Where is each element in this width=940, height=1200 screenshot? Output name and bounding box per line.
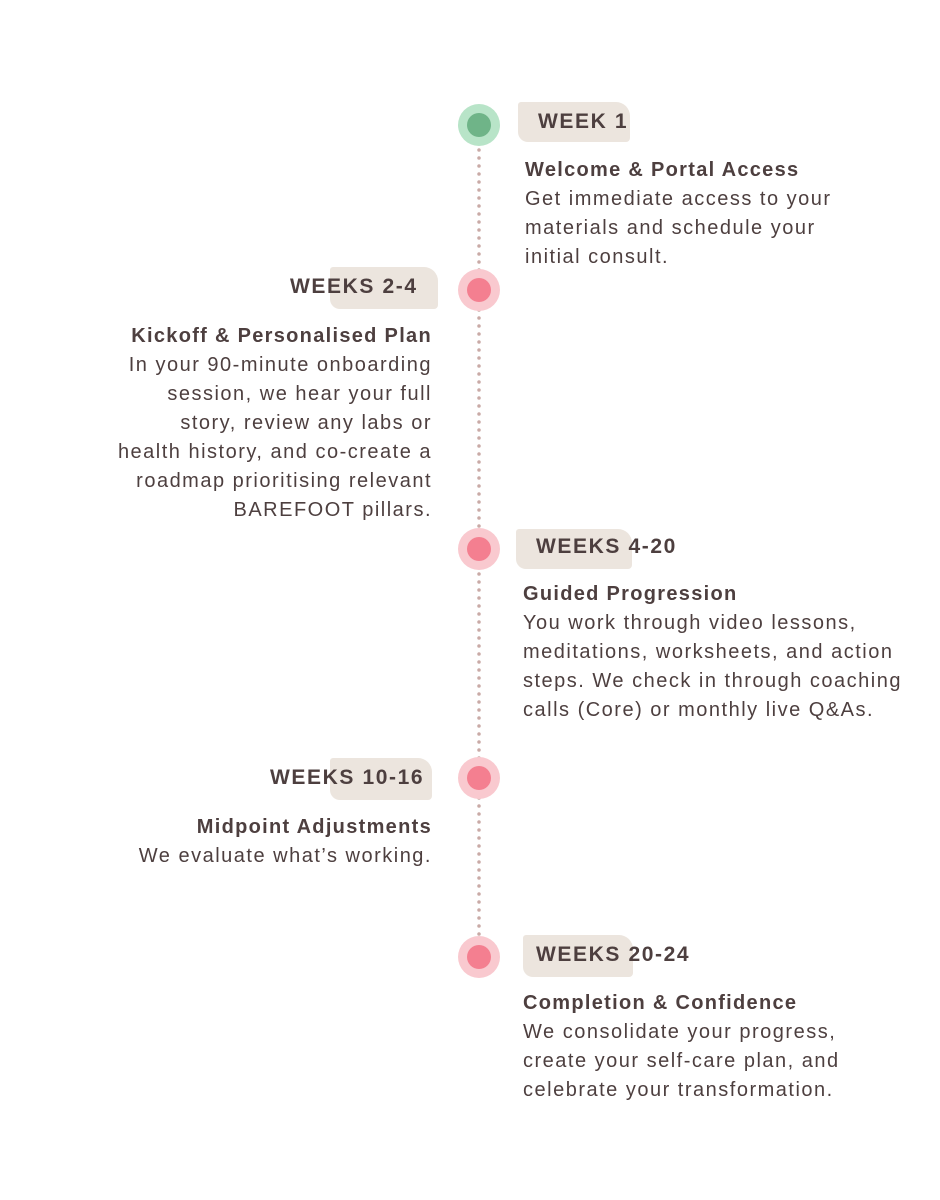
node: weeks 10-16 [458,757,500,799]
text: week 1: initial consult. [525,246,669,268]
text: weeks 10-16: Midpoint Adjustments [197,816,432,838]
brush: weeks 10-16 [330,758,432,800]
text: weeks 2-4: story, review any labs or [180,412,432,434]
text: weeks 2-4: In your 90-minute onboarding [129,354,432,376]
text: weeks 20-24: celebrate your transformation. [523,1079,834,1101]
text: week 1 [525,159,832,268]
text: weeks 10-16 [138,816,432,867]
brush: week 1 [518,102,630,142]
node: weeks 20-24 [458,936,500,978]
text: weeks 20-24: create your self-care plan, and [523,1050,840,1072]
node: weeks 4-20 [458,528,500,570]
text: weeks 20-24: We consolidate your progress, [523,1021,836,1043]
text: weeks 20-24: Completion & Confidence [523,992,797,1014]
text: weeks 4-20: calls (Core) or monthly live Q&As. [523,699,874,721]
text: week 1: Welcome & Portal Access [525,159,799,181]
text: weeks 4-20: You work through video lessons, [523,612,857,634]
node: week 1 [458,104,500,146]
text: weeks 2-4 [118,325,432,521]
heading: weeks 2-4: WEEKS 2-4 [290,275,418,298]
brush: weeks 4-20 [516,529,632,569]
text: weeks 2-4: BAREFOOT pillars. [234,499,432,521]
text: weeks 20-24 [523,992,840,1101]
brush: weeks 20-24 [523,935,633,977]
text: weeks 2-4: session, we hear your full [167,383,432,405]
heading: weeks 4-20: WEEKS 4-20 [536,535,677,558]
text: weeks 4-20: meditations, worksheets, and action [523,641,893,663]
text: week 1: materials and schedule your [525,217,816,239]
heading: weeks 10-16: WEEKS 10-16 [270,766,424,789]
text: weeks 4-20 [523,583,902,721]
text: weeks 10-16: We evaluate what’s working. [139,845,432,867]
node: weeks 2-4 [458,269,500,311]
text: weeks 2-4: health history, and co-create a [118,441,432,463]
brush: weeks 2-4 [330,267,438,309]
text: weeks 4-20: Guided Progression [523,583,738,605]
text: weeks 2-4: roadmap prioritising relevant [136,470,432,492]
text: week 1: Get immediate access to your [525,188,832,210]
heading: week 1: WEEK 1 [538,110,628,133]
heading: weeks 20-24: WEEKS 20-24 [536,943,690,966]
text: weeks 2-4: Kickoff & Personalised Plan [131,325,432,347]
text: weeks 4-20: steps. We check in through coaching [523,670,902,692]
